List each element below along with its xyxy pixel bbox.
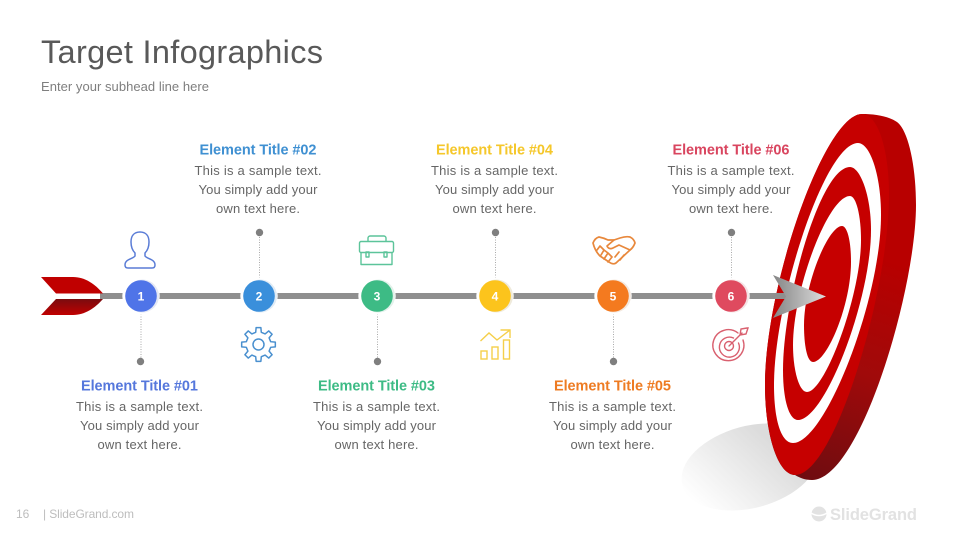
text: element 2: own text here. [216, 201, 300, 216]
arrow shaft [100, 293, 786, 299]
target bullseye [804, 226, 851, 362]
text: element 1: Element Title #01 [81, 378, 198, 394]
text: element 5 [549, 378, 676, 452]
icon: handshake [593, 237, 635, 264]
step 3 [313, 236, 440, 452]
text: element 4: own text here. [452, 201, 536, 216]
connector 5 [610, 314, 617, 365]
text: element 3: own text here. [334, 437, 418, 452]
connector 1 [137, 314, 144, 365]
connector 6 [728, 229, 735, 279]
text: element 6: own text here. [689, 201, 773, 216]
text: element 1: You simply add your [80, 418, 200, 433]
step 4 [431, 142, 558, 359]
icon: gear [242, 328, 275, 361]
text: element 6: Element Title #06 [672, 142, 790, 158]
text: element 2: Element Title #02 [200, 142, 316, 158]
node 5: 5 [610, 290, 617, 304]
step 1 [76, 232, 203, 452]
text: element 4: You simply add your [435, 182, 555, 197]
icon: target [713, 328, 748, 361]
node 1: 1 [138, 290, 145, 304]
text: element 3: You simply add your [317, 418, 437, 433]
node 5 [594, 277, 632, 315]
icon: growth chart [480, 330, 510, 359]
step 6 [668, 142, 794, 361]
text: element 1 [76, 378, 203, 452]
text: element 5: own text here. [570, 437, 654, 452]
icon: briefcase [360, 236, 394, 264]
target inner white ring [793, 196, 861, 392]
text: element 4 [431, 142, 558, 216]
node 2 [240, 277, 278, 315]
target outer white ring [774, 143, 881, 443]
text: element 2: This is a sample text. [194, 163, 322, 178]
node 6 [712, 277, 750, 315]
footer site: | SlideGrand.com [43, 507, 134, 521]
node 3 [358, 277, 396, 315]
connector 4 [492, 229, 499, 279]
connector 3 [374, 314, 381, 365]
text: element 5: You simply add your [553, 418, 673, 433]
title: Target Infographics [41, 34, 323, 70]
step 5 [549, 237, 676, 452]
text: element 6 [668, 142, 794, 216]
text: element 6: You simply add your [672, 182, 791, 197]
icon: person [125, 232, 155, 268]
target middle red ring [783, 167, 871, 420]
watermark logo: SlideGrand [830, 506, 917, 524]
node 6: 6 [728, 290, 735, 304]
footer page number: 16 [16, 507, 30, 521]
arrow fletching [41, 277, 103, 315]
text: element 3: This is a sample text. [313, 399, 440, 414]
target board [765, 114, 916, 480]
node 4 [476, 277, 514, 315]
text: element 1: own text here. [98, 437, 182, 452]
node 1 [122, 277, 160, 315]
arrow head [773, 275, 826, 318]
text: element 4: Element Title #04 [436, 142, 553, 158]
connector 2 [256, 229, 263, 279]
node 3: 3 [374, 290, 381, 304]
target front face [765, 114, 889, 475]
node 4: 4 [492, 290, 499, 304]
text: element 4: This is a sample text. [431, 163, 558, 178]
subhead: Enter your subhead line here [41, 79, 209, 94]
text: element 2: You simply add your [198, 182, 318, 197]
text: element 2 [194, 142, 322, 216]
target shadow [672, 409, 828, 525]
text: element 6: This is a sample text. [668, 163, 794, 178]
node 2: 2 [256, 290, 263, 304]
text: element 1: This is a sample text. [76, 399, 203, 414]
text: element 3 [313, 378, 440, 452]
step 2 [194, 142, 322, 361]
text: element 5: This is a sample text. [549, 399, 676, 414]
text: element 5: Element Title #05 [554, 378, 671, 394]
target side [765, 114, 916, 480]
text: element 3: Element Title #03 [318, 378, 435, 394]
